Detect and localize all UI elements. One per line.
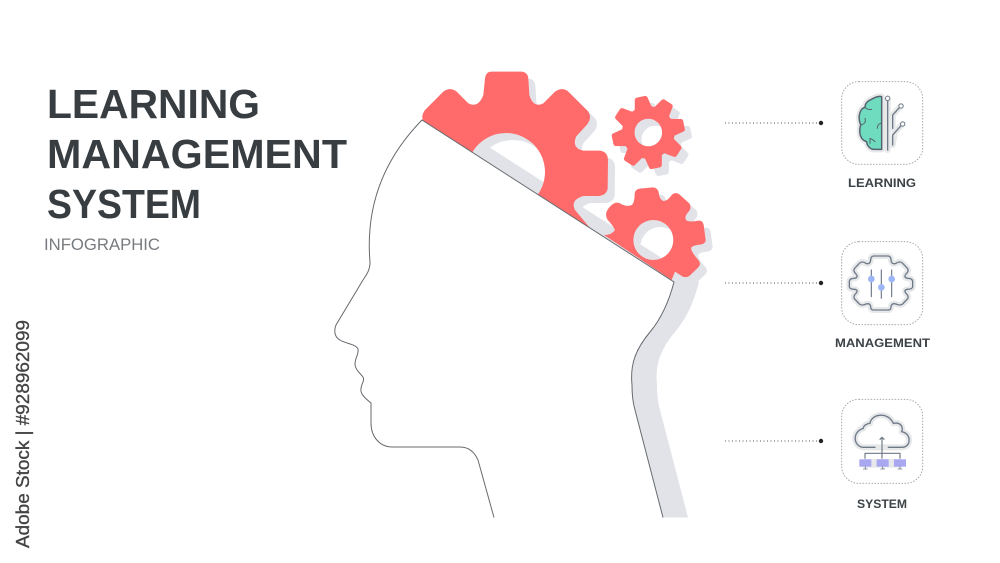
title: LEARNING [47, 81, 260, 127]
title: MANAGEMENT [47, 131, 347, 177]
gear shadows [429, 79, 713, 287]
panel: management [835, 242, 931, 350]
subtitle: INFOGRAPHIC [44, 236, 160, 254]
stock credit: Adobe Stock | #928962099 [13, 320, 33, 548]
lower gear [604, 187, 706, 280]
connector: system [725, 439, 823, 443]
icon: brain with circuit [859, 96, 905, 150]
panel: learning [842, 82, 923, 190]
icon: cloud network [855, 415, 909, 469]
head with gears [335, 72, 713, 517]
small upper gear [605, 89, 692, 176]
connector: management [725, 281, 823, 285]
label: system: SYSTEM [857, 497, 907, 511]
connector: learning [725, 121, 823, 125]
icon frame: management [842, 242, 923, 325]
icon: gear with sliders [849, 256, 913, 310]
icon frame: system [842, 399, 923, 483]
head shadow [360, 120, 699, 518]
panel: system [842, 399, 923, 511]
title: SYSTEM [47, 181, 201, 227]
icon frame: learning [842, 82, 923, 164]
title [47, 81, 347, 227]
label: management: MANAGEMENT [835, 336, 931, 350]
large gear [422, 72, 608, 240]
head outline [335, 120, 674, 518]
label: learning: LEARNING [848, 176, 916, 190]
